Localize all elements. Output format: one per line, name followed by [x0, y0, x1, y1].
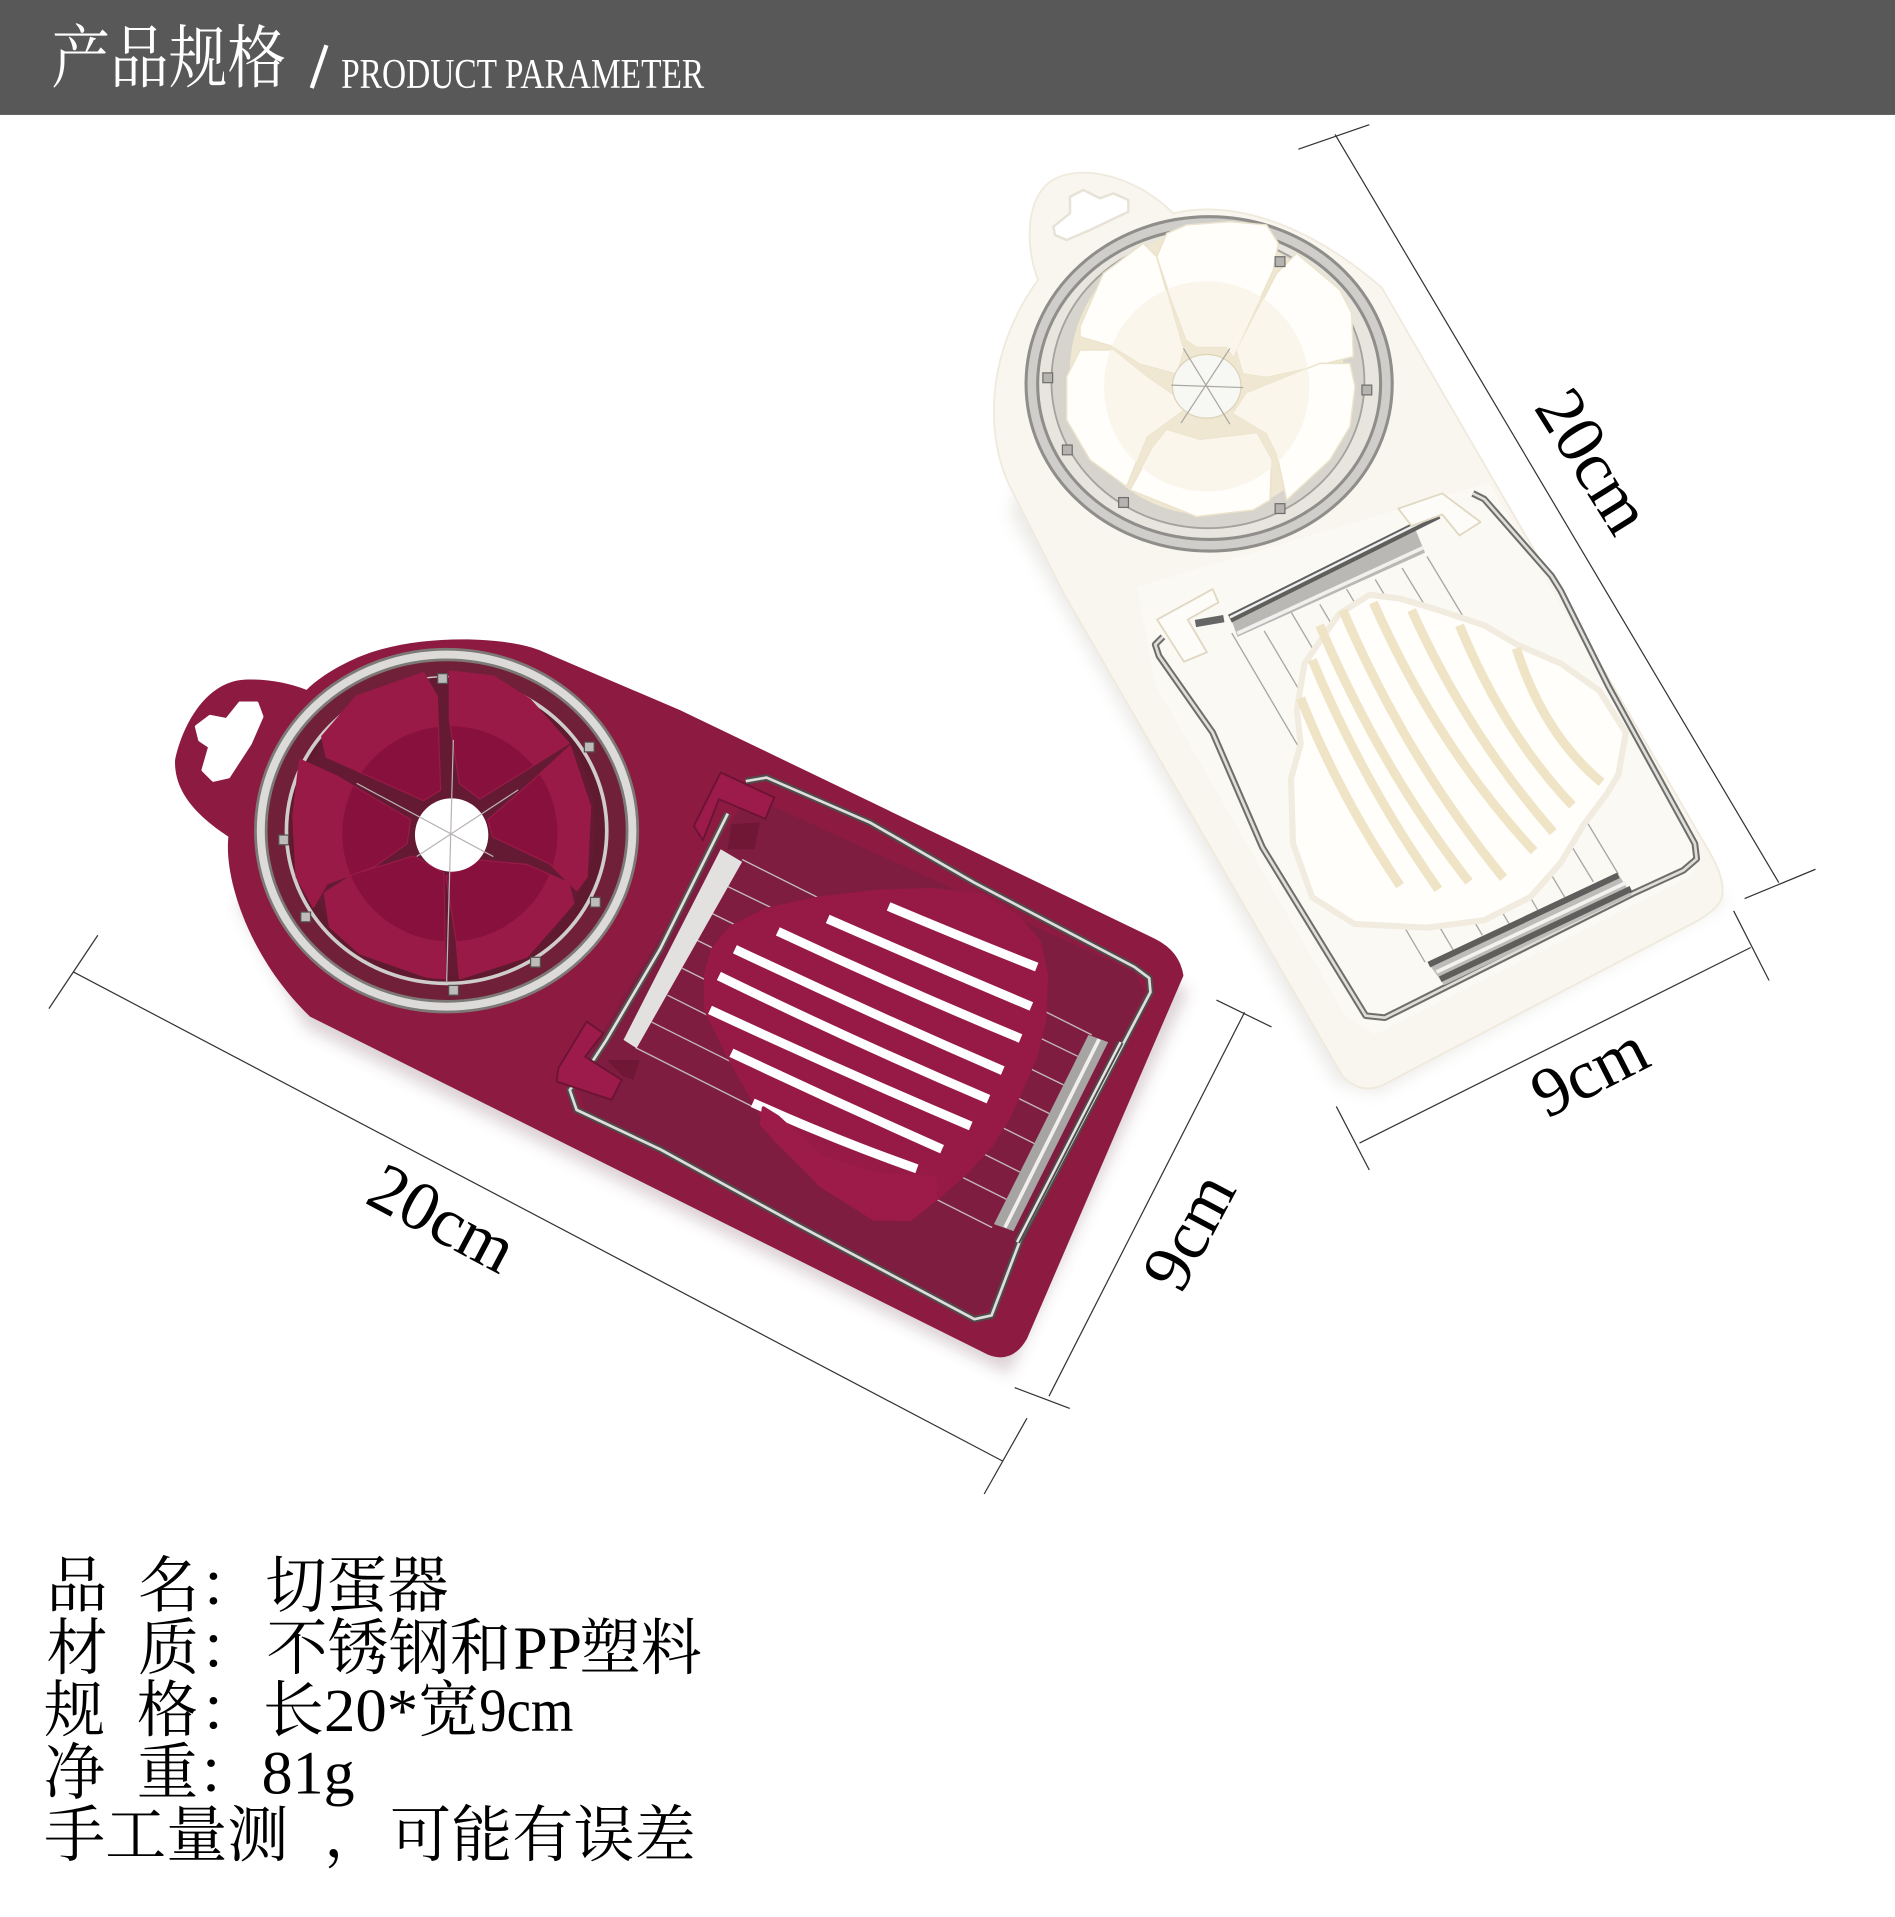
spec: material: 不锈钢和 [267, 1616, 511, 1683]
dimension: white length [1298, 125, 1816, 899]
red slicer clip bottom [557, 1022, 640, 1100]
red egg wedges [293, 672, 590, 978]
red ring wires [357, 740, 518, 983]
spec: product name [46, 1553, 449, 1620]
red wedge inner shading [342, 726, 557, 941]
dimension: red length [49, 935, 1027, 1494]
spec: material: 材 [46, 1616, 108, 1683]
red slicer front egg piece [762, 1108, 935, 1219]
red wedge shadow gaps [297, 677, 595, 976]
spec: measurement note [44, 1803, 696, 1870]
red slicer board and tab [175, 639, 1183, 1357]
white wedge inner shading [1104, 281, 1309, 491]
heading: english subtitle: PRODUCT PARAMETER [341, 51, 705, 98]
red slicer shadow [238, 654, 1188, 1374]
spec: net weight: 81g [262, 1741, 355, 1808]
spec: size: 9cm [479, 1678, 573, 1745]
white slicer upper bar [1195, 513, 1438, 637]
white slicer lower bar [1429, 874, 1632, 985]
heading slash [312, 45, 326, 88]
spec: size: 规 [44, 1678, 105, 1745]
white slicer shadow [1010, 245, 1726, 1094]
red slicer right bar [994, 1035, 1121, 1242]
red slicer wires [636, 859, 1092, 1227]
spec: size [44, 1678, 573, 1745]
spec: material: PP [513, 1616, 582, 1683]
spec: product name: 切蛋器 [265, 1553, 449, 1620]
red slicer egg press [706, 890, 1046, 1219]
red egg slicer product [175, 639, 1188, 1374]
white slicer wires [1232, 557, 1618, 962]
red slicer metal frame [570, 778, 1150, 1319]
spec: material: 塑料 [580, 1616, 702, 1683]
white slicer metal frame [1155, 493, 1697, 1018]
label: red 9cm: 9cm [1127, 1161, 1251, 1303]
spec: measurement note: 可能有误差 [390, 1803, 696, 1870]
spec: material [46, 1616, 702, 1683]
label: white 20cm: 20cm [1520, 375, 1667, 547]
red slicer metal ring [261, 655, 632, 1007]
spec: material: 质 [138, 1616, 199, 1683]
spec: net weight: ： [197, 1741, 258, 1808]
header bar [0, 0, 1895, 115]
spec: net weight [44, 1741, 355, 1808]
white ring wires [1171, 348, 1243, 424]
spec: size: 宽 [418, 1678, 479, 1745]
spec: size: ： [199, 1678, 260, 1745]
white egg slicer product [994, 173, 1726, 1094]
spec: material: ： [199, 1616, 260, 1683]
white slicer hanger hole [1053, 190, 1128, 240]
spec: product name: ： [199, 1553, 260, 1620]
white slicer board and tab [994, 173, 1723, 1088]
red slicer left bar [593, 814, 742, 1060]
spec: measurement note: ， [324, 1803, 385, 1870]
dimension: white width [1336, 911, 1769, 1170]
spec: size: 长 [263, 1678, 324, 1745]
spec: size: 20* [324, 1678, 418, 1745]
white slicer metal ring [1032, 223, 1386, 545]
white slicer raised plate [1137, 483, 1699, 1034]
white egg wedges [1067, 222, 1355, 517]
red ring rivets [279, 674, 600, 995]
specification text block [44, 1553, 702, 1870]
label: red 20cm: 20cm [356, 1148, 529, 1289]
spec: product name: 品 [46, 1553, 108, 1620]
spec: size: 格 [137, 1678, 198, 1745]
red slicer hanger hole [197, 703, 262, 780]
white slicer clip left [1157, 589, 1218, 662]
spec: product name: 名 [138, 1553, 199, 1620]
spec: net weight: 净 [44, 1741, 105, 1808]
spec: measurement note: 手工量测 [44, 1803, 288, 1870]
white slicer clip right [1398, 493, 1481, 535]
white slicer centre hole [1172, 355, 1241, 418]
label: white 9cm: 9cm [1519, 1010, 1661, 1133]
dimension: red width [1015, 1000, 1271, 1408]
white ring rivets [1043, 257, 1372, 513]
spec: net weight: 重 [137, 1741, 198, 1808]
red slicer centre hole [415, 798, 488, 872]
heading: product specification: 产品规格 [51, 21, 286, 97]
red slicer inner plate [575, 795, 1144, 1314]
white slicer egg press [1291, 595, 1626, 928]
red slicer clip top [694, 772, 774, 849]
